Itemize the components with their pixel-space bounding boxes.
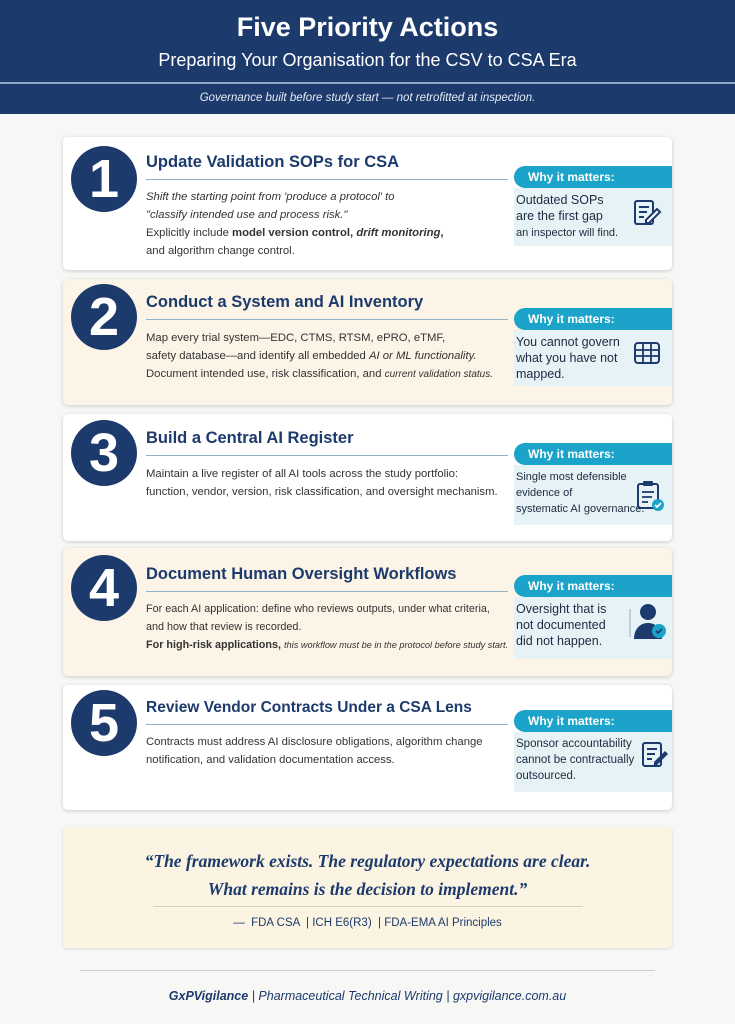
number 2 [71,284,137,350]
quote box [63,827,672,948]
body 4: and how that review is recorded. [146,621,301,633]
card 4 [63,548,672,676]
icon: clipboard check [637,481,664,511]
why 2: Why it matters: [528,312,615,326]
why 5 [514,710,672,792]
why 5: Sponsor accountability [516,738,632,750]
quote text [145,851,590,899]
subtitle: Preparing Your Organisation for the CSV to CSA Era [158,50,577,70]
number 5 [71,690,137,756]
why 4 [514,575,672,659]
body 3: function, vendor, version, risk classification, and oversight mechanism. [146,486,498,498]
number 4: 4 [89,558,119,618]
why 5: Why it matters: [528,714,615,728]
quote text: What remains is the decision to implement.” [208,879,527,899]
icon: person check [630,604,666,639]
body 1: Explicitly include model version control, drift monitoring, [146,227,444,239]
body 3 [146,468,498,498]
why 3 [514,443,672,525]
sources: — FDA CSA | ICH E6(R3) | FDA-EMA AI Principles [233,917,502,929]
body 2: Document intended use, risk classification, and current validation status. [146,368,493,380]
body 1: and algorithm change control. [146,245,295,257]
body 1: "classify intended use and process risk." [146,209,347,221]
card 5 [63,685,672,810]
number 4 [71,555,137,621]
heading 4: Document Human Oversight Workflows [146,565,456,583]
card 2 [63,279,672,405]
heading 3: Build a Central AI Register [146,429,354,447]
body 4: For high-risk applications, this workflow must be in the protocol before study start. [146,639,508,651]
why 3: Single most defensible [516,471,627,483]
why 1: Why it matters: [528,170,615,184]
header [0,0,735,114]
body 2: safety database—and identify all embedded AI or ML functionality. [146,350,477,362]
number 5: 5 [89,693,119,753]
body 2: Map every trial system—EDC, CTMS, RTSM, ePRO, eTMF, [146,332,445,344]
heading 1: Update Validation SOPs for CSA [146,153,399,171]
number 1 [71,146,137,212]
why 5: outsourced. [516,770,576,782]
title: Five Priority Actions [237,12,498,42]
why 2 [514,308,672,386]
body 1 [146,191,444,257]
why 1: are the first gap [516,209,603,223]
body 5: notification, and validation documentation access. [146,754,395,766]
body 4 [146,603,508,651]
tagline: Governance built before study start — not retrofitted at inspection. [200,92,535,104]
icon: document pen 2 [642,742,668,767]
body 5: Contracts must address AI disclosure obligations, algorithm change [146,736,483,748]
footer: GxPVigilance | Pharmaceutical Technical Writing | gxpvigilance.com.au [169,989,566,1003]
card 1 [63,137,672,270]
why 4: not documented [516,618,606,632]
body 2 [146,332,493,380]
why 3: evidence of [516,487,572,499]
body 3: Maintain a live register of all AI tools across the study portfolio: [146,468,458,480]
heading 5: Review Vendor Contracts Under a CSA Lens [146,699,472,716]
card 3 [63,414,672,541]
why 4: Oversight that is [516,602,606,616]
why 1: Outdated SOPs [516,193,604,207]
why 3: Why it matters: [528,447,615,461]
why 2: what you have not [516,351,617,365]
number 3 [71,420,137,486]
heading 2: Conduct a System and AI Inventory [146,293,423,311]
icon: grid [634,342,660,364]
why 4: Why it matters: [528,579,615,593]
quote text: “The framework exists. The regulatory expectations are clear. [145,851,590,871]
number 2: 2 [89,287,119,347]
number 1: 1 [89,149,119,209]
why 4: did not happen. [516,634,602,648]
why 1 [514,166,672,246]
why 2: You cannot govern [516,335,620,349]
number 3: 3 [89,423,119,483]
why 1: an inspector will find. [516,227,618,239]
icon: document pen [634,200,662,225]
body 4: For each AI application: define who reviews outputs, under what criteria, [146,603,490,615]
body 1: Shift the starting point from 'produce a protocol' to [146,191,395,203]
why 5: cannot be contractually [516,754,634,766]
why 2: mapped. [516,367,565,381]
body 5 [146,736,483,766]
why 3: systematic AI governance. [516,503,644,515]
